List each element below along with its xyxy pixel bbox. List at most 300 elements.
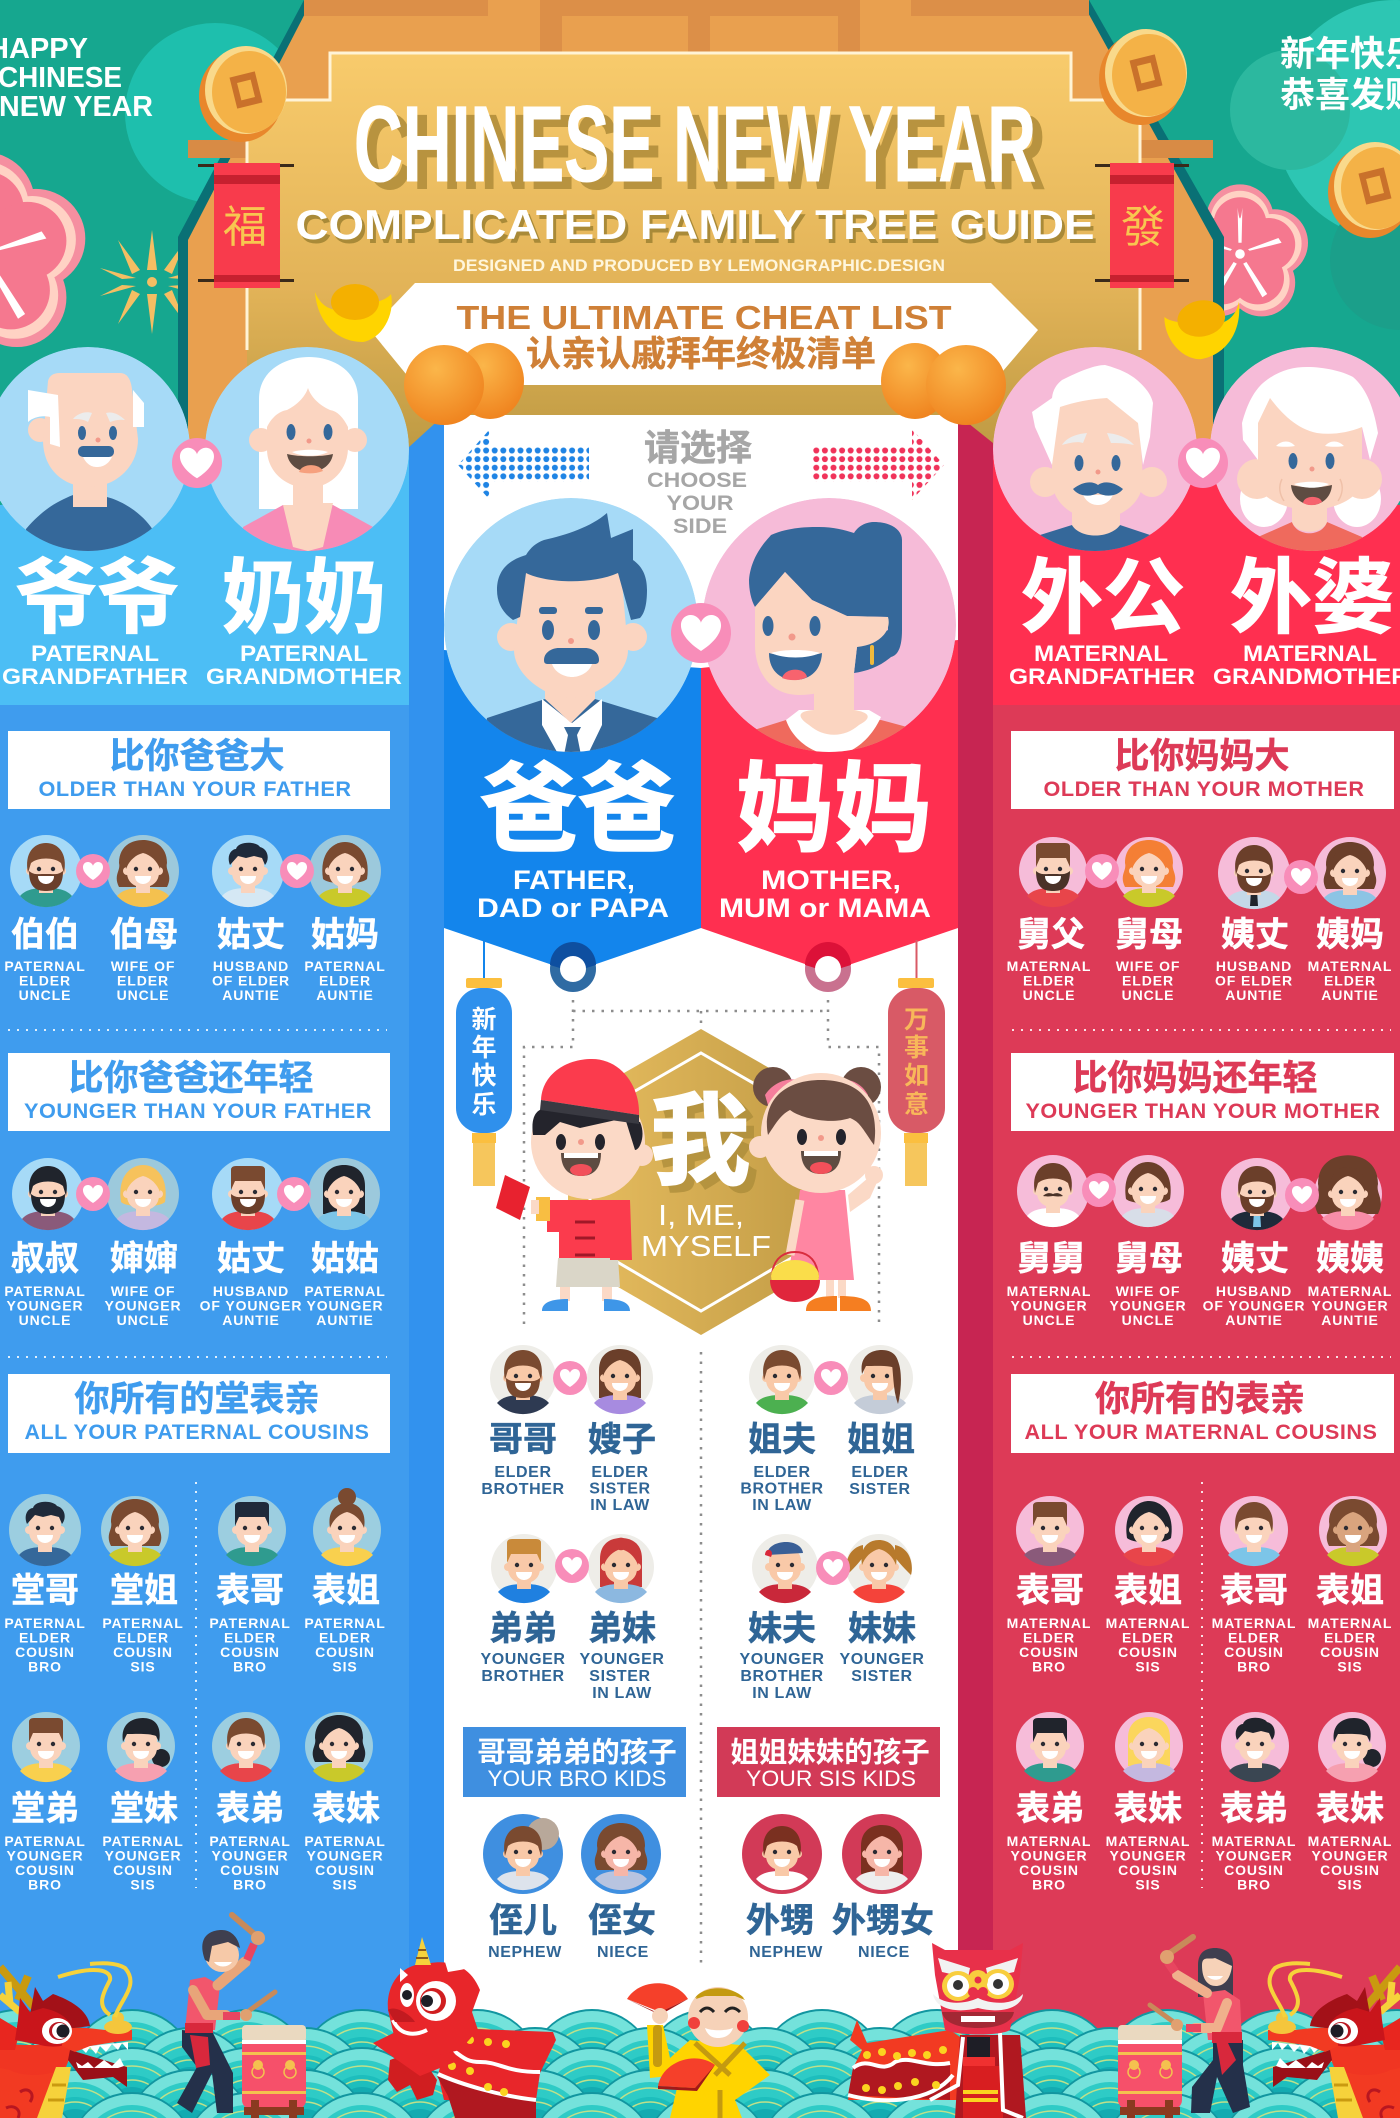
card: husband of younger auntie: 姨丈 bbox=[1221, 1240, 1289, 1278]
card: wife of elder uncle: WIFE OF bbox=[111, 958, 175, 974]
hexagon: me bbox=[568, 1029, 834, 1335]
card: maternal elder cousin bro: ELDER bbox=[1023, 1630, 1075, 1646]
card: maternal younger cousin bro: YOUNGER bbox=[1010, 1848, 1088, 1864]
heart: paternal grandparents bbox=[172, 438, 222, 488]
card: paternal younger cousin sis: PATERNAL bbox=[102, 1833, 184, 1849]
name: maternal grandmother: GRANDMOTHER bbox=[1213, 664, 1400, 689]
card: elder sister in law: SISTER bbox=[589, 1480, 651, 1498]
lantern left: 新 bbox=[471, 1006, 497, 1034]
card: paternal elder cousin bro: PATERNAL bbox=[209, 1615, 291, 1631]
card: paternal elder cousin sis: 堂姐 bbox=[110, 1572, 178, 1610]
card: husband of younger auntie: OF YOUNGER bbox=[200, 1298, 302, 1314]
oranges left bbox=[404, 343, 524, 425]
card: maternal elder cousin bro: 表哥 bbox=[1220, 1572, 1288, 1610]
greeting: happy chinese new year bbox=[0, 33, 153, 123]
card: maternal elder cousin sis: ELDER bbox=[1122, 1630, 1174, 1646]
choose your side: 请选择 bbox=[644, 427, 752, 468]
arrow left bbox=[458, 429, 589, 500]
card: paternal younger cousin sis: COUSIN bbox=[113, 1862, 173, 1878]
card: maternal younger cousin sis: 表妹 bbox=[1114, 1790, 1182, 1828]
card: maternal younger cousin bro: COUSIN bbox=[1224, 1862, 1284, 1878]
section header: younger than your father bbox=[8, 1053, 390, 1131]
heart bbox=[816, 1551, 850, 1585]
card: paternal younger uncle bbox=[4, 1158, 86, 1328]
card: paternal elder uncle: UNCLE bbox=[19, 987, 71, 1003]
name: maternal grandmother bbox=[1213, 553, 1400, 689]
section header: older than your father: 比你爸爸大 bbox=[109, 737, 285, 776]
card: husband of younger auntie bbox=[200, 1158, 302, 1328]
heart: maternal grandparents bbox=[1178, 438, 1228, 488]
card: maternal elder auntie: MATERNAL bbox=[1308, 958, 1392, 974]
lion left bbox=[373, 1937, 556, 2118]
cheat list banner: THE ULTIMATE CHEAT LIST bbox=[456, 299, 952, 336]
card: maternal elder cousin bro: COUSIN bbox=[1224, 1644, 1284, 1660]
card: paternal elder cousin bro: ELDER bbox=[224, 1630, 276, 1646]
name: mother: 妈妈 bbox=[736, 754, 932, 864]
card: maternal younger cousin bro: 表弟 bbox=[1220, 1790, 1288, 1828]
title bbox=[354, 83, 1046, 212]
heart bbox=[76, 854, 110, 888]
banner: your sis kids bbox=[717, 1727, 940, 1797]
father banner bbox=[444, 650, 701, 992]
card: younger sister in law: IN LAW bbox=[592, 1685, 652, 1702]
card: husband of elder auntie: OF ELDER bbox=[212, 972, 290, 988]
card: husband of younger auntie bbox=[1203, 1158, 1305, 1328]
card: maternal younger auntie: 姨姨 bbox=[1316, 1240, 1384, 1278]
hexagon: me: MYSELF bbox=[641, 1231, 771, 1263]
card: paternal younger uncle: PATERNAL bbox=[4, 1283, 86, 1299]
choose your side: SIDE bbox=[673, 515, 727, 538]
card: niece sis: NIECE bbox=[858, 1944, 910, 1961]
card: wife of younger uncle: YOUNGER bbox=[104, 1298, 182, 1314]
choose your side: YOUR bbox=[666, 492, 734, 515]
card: husband of younger auntie: HUSBAND bbox=[1216, 1283, 1292, 1299]
name: paternal grandmother bbox=[206, 553, 402, 689]
card: paternal younger cousin sis: SIS bbox=[130, 1876, 156, 1892]
section header: older than your father bbox=[8, 731, 390, 809]
card: younger sister bbox=[839, 1534, 925, 1685]
card: maternal younger auntie: MATERNAL bbox=[1308, 1283, 1392, 1299]
card: paternal elder uncle: 伯伯 bbox=[11, 916, 79, 954]
card: paternal elder cousin sis: 表姐 bbox=[312, 1572, 380, 1610]
card: paternal younger cousin bro: COUSIN bbox=[15, 1862, 75, 1878]
card: maternal younger cousin bro: BRO bbox=[1237, 1876, 1271, 1892]
card: wife of elder uncle: UNCLE bbox=[117, 987, 169, 1003]
card: maternal elder cousin bro: 表哥 bbox=[1016, 1572, 1084, 1610]
name: paternal grandfather: GRANDFATHER bbox=[2, 664, 188, 689]
card: younger brother in law: YOUNGER bbox=[739, 1651, 825, 1668]
heart bbox=[814, 1361, 848, 1395]
card: younger sister: YOUNGER bbox=[839, 1651, 925, 1668]
name: maternal grandmother: 外婆 bbox=[1230, 553, 1394, 644]
section header: all your paternal cousins: 你所有的堂表亲 bbox=[74, 1380, 320, 1419]
cheat list banner: 认亲认戚拜年终极清单 bbox=[526, 335, 876, 374]
section header: older than your father: OLDER THAN YOUR FATHER bbox=[38, 778, 352, 801]
card: nephew bro: NEPHEW bbox=[488, 1944, 562, 1961]
card: maternal younger cousin bro: MATERNAL bbox=[1212, 1833, 1296, 1849]
card: paternal younger cousin bro: PATERNAL bbox=[209, 1833, 291, 1849]
card: paternal elder cousin sis: SIS bbox=[130, 1658, 156, 1674]
card: paternal elder cousin bro: ELDER bbox=[19, 1630, 71, 1646]
name: paternal grandfather: PATERNAL bbox=[31, 641, 159, 666]
section header: younger than your mother bbox=[1011, 1053, 1394, 1131]
card: maternal younger cousin bro: MATERNAL bbox=[1007, 1833, 1091, 1849]
card: paternal younger cousin bro: 表弟 bbox=[216, 1790, 284, 1828]
card: maternal elder cousin sis: COUSIN bbox=[1118, 1644, 1178, 1660]
card: elder brother: BROTHER bbox=[481, 1481, 565, 1498]
card: elder brother in law: ELDER bbox=[753, 1464, 811, 1481]
card: younger brother: 弟弟 bbox=[489, 1610, 557, 1648]
card: wife of younger uncle: 舅母 bbox=[1115, 1240, 1183, 1278]
card: elder sister: 姐姐 bbox=[847, 1421, 915, 1459]
label: mother: MOTHER, bbox=[761, 865, 901, 895]
card: paternal elder cousin sis bbox=[304, 1488, 386, 1674]
card: wife of elder uncle bbox=[107, 835, 179, 1003]
name: maternal grandfather: GRANDFATHER bbox=[1009, 664, 1195, 689]
section header: all your maternal cousins: 你所有的表亲 bbox=[1095, 1380, 1305, 1419]
card: paternal younger auntie: 姑姑 bbox=[311, 1240, 379, 1278]
card: maternal younger uncle: MATERNAL bbox=[1007, 1283, 1091, 1299]
card: paternal elder cousin sis: ELDER bbox=[319, 1630, 371, 1646]
card: elder sister in law: ELDER bbox=[591, 1464, 649, 1481]
card: nephew sis bbox=[742, 1814, 823, 1961]
drum right bbox=[1118, 2025, 1182, 2118]
card: maternal elder cousin bro: BRO bbox=[1032, 1658, 1066, 1674]
card: wife of elder uncle: ELDER bbox=[1122, 972, 1174, 988]
drum left bbox=[242, 2025, 306, 2118]
section header: older than your mother: 比你妈妈大 bbox=[1114, 737, 1290, 776]
card: maternal elder cousin sis bbox=[1106, 1496, 1190, 1674]
card: paternal elder uncle: PATERNAL bbox=[4, 958, 86, 974]
card: maternal elder cousin bro bbox=[1007, 1496, 1091, 1674]
card: elder brother in law: BROTHER bbox=[740, 1480, 824, 1498]
card: maternal elder cousin sis: ELDER bbox=[1324, 1630, 1376, 1646]
name: paternal grandfather: 爷爷 bbox=[15, 553, 179, 644]
card: maternal younger uncle: UNCLE bbox=[1023, 1312, 1075, 1328]
section header: younger than your father: 比你爸爸还年轻 bbox=[68, 1059, 314, 1098]
card: elder brother: ELDER bbox=[494, 1464, 552, 1481]
name: father: 爸爸 bbox=[480, 754, 676, 864]
name: maternal grandfather: MATERNAL bbox=[1034, 641, 1168, 666]
card: paternal elder cousin bro: COUSIN bbox=[15, 1644, 75, 1660]
card: elder sister in law: IN LAW bbox=[590, 1497, 650, 1514]
coin left bbox=[199, 46, 287, 142]
card: maternal younger cousin bro: BRO bbox=[1032, 1876, 1066, 1892]
card: paternal elder auntie: AUNTIE bbox=[316, 987, 374, 1003]
label: mother: MUM or MAMA bbox=[719, 893, 931, 923]
card: maternal younger cousin sis: MATERNAL bbox=[1308, 1833, 1392, 1849]
banner: your bro kids: YOUR BRO KIDS bbox=[488, 1766, 666, 1791]
card: maternal younger auntie: AUNTIE bbox=[1321, 1312, 1379, 1328]
lantern left: 年 bbox=[471, 1034, 497, 1062]
scroll right: fa bbox=[1095, 163, 1189, 288]
card: paternal younger cousin sis bbox=[102, 1712, 184, 1892]
drummer left bbox=[177, 1915, 275, 2113]
monkey king with fan bbox=[627, 1983, 770, 2118]
card: maternal elder cousin bro: COUSIN bbox=[1019, 1644, 1079, 1660]
card: wife of younger uncle: YOUNGER bbox=[1109, 1298, 1187, 1314]
portrait: maternal grandfather bbox=[993, 347, 1197, 559]
card: wife of younger uncle bbox=[1109, 1155, 1187, 1328]
lantern right: 意 bbox=[904, 1090, 929, 1119]
card: younger sister in law: 弟妹 bbox=[588, 1610, 656, 1648]
heart bbox=[280, 854, 314, 888]
portrait: paternal grandfather bbox=[0, 347, 190, 559]
greeting: happy chinese new year: CHINESE bbox=[0, 62, 122, 94]
card: maternal elder auntie bbox=[1308, 837, 1392, 1003]
card: paternal younger cousin bro: YOUNGER bbox=[211, 1848, 289, 1864]
card: paternal elder cousin sis: PATERNAL bbox=[102, 1615, 184, 1631]
card: wife of younger uncle: UNCLE bbox=[1122, 1312, 1174, 1328]
card: wife of elder uncle bbox=[1115, 837, 1183, 1003]
card: younger brother in law: IN LAW bbox=[752, 1685, 812, 1702]
card: elder sister bbox=[847, 1345, 915, 1498]
scroll right: fa: 發 bbox=[1121, 203, 1165, 252]
heart bbox=[1284, 860, 1318, 894]
card: maternal elder uncle: UNCLE bbox=[1023, 987, 1075, 1003]
card: wife of younger uncle bbox=[104, 1158, 182, 1328]
waves bbox=[0, 2009, 1400, 2118]
card: paternal younger cousin sis bbox=[304, 1712, 386, 1892]
card: younger brother bbox=[480, 1534, 566, 1685]
card: younger sister in law bbox=[579, 1534, 665, 1702]
subtitle: COMPLICATED FAMILY TREE GUIDE bbox=[298, 205, 1098, 252]
card: paternal younger cousin sis: PATERNAL bbox=[304, 1833, 386, 1849]
card: paternal younger cousin sis: COUSIN bbox=[315, 1862, 375, 1878]
card: paternal elder auntie: 姑妈 bbox=[311, 916, 379, 954]
card: maternal elder cousin sis bbox=[1308, 1496, 1392, 1674]
lantern right: 事 bbox=[904, 1034, 929, 1062]
decorative teal circles bbox=[125, 0, 1400, 330]
heart bbox=[1085, 854, 1119, 888]
card: maternal younger cousin bro: YOUNGER bbox=[1215, 1848, 1293, 1864]
boy bbox=[496, 1059, 653, 1311]
name: maternal grandmother: MATERNAL bbox=[1243, 641, 1377, 666]
lantern left: 快 bbox=[471, 1062, 497, 1090]
section header: younger than your mother: 比你妈妈还年轻 bbox=[1072, 1059, 1318, 1098]
card: paternal younger cousin bro: 堂弟 bbox=[11, 1790, 79, 1828]
lantern left bbox=[456, 940, 512, 1186]
card: younger brother in law: BROTHER bbox=[740, 1668, 824, 1685]
scroll left: fu bbox=[198, 163, 294, 288]
card: husband of younger auntie: AUNTIE bbox=[222, 1312, 280, 1328]
card: paternal elder cousin sis: PATERNAL bbox=[304, 1615, 386, 1631]
lantern right: 如 bbox=[904, 1062, 929, 1090]
choose your side bbox=[644, 427, 752, 538]
card: maternal elder uncle bbox=[1007, 837, 1091, 1003]
card: maternal elder auntie: ELDER bbox=[1324, 972, 1376, 988]
dragon right bbox=[1268, 1963, 1400, 2118]
greeting: chinese bbox=[1280, 35, 1400, 115]
card: husband of elder auntie bbox=[1215, 837, 1293, 1003]
card: paternal elder auntie bbox=[304, 835, 386, 1003]
section header: younger than your mother: YOUNGER THAN YOUR MOTHER bbox=[1026, 1100, 1380, 1123]
card: paternal elder cousin bro bbox=[209, 1496, 291, 1674]
section header: all your maternal cousins: ALL YOUR MATERNAL COUSINS bbox=[1024, 1421, 1378, 1444]
card: paternal elder cousin sis: COUSIN bbox=[315, 1644, 375, 1660]
card: husband of younger auntie: OF YOUNGER bbox=[1203, 1298, 1305, 1314]
heart bbox=[76, 1177, 110, 1211]
card: wife of elder uncle: 舅母 bbox=[1115, 916, 1183, 954]
card: paternal elder uncle: ELDER bbox=[19, 972, 71, 988]
card: paternal elder cousin bro bbox=[4, 1494, 86, 1674]
card: maternal younger uncle: 舅舅 bbox=[1017, 1240, 1085, 1278]
card: husband of younger auntie: HUSBAND bbox=[213, 1283, 289, 1299]
coin right bbox=[1099, 29, 1187, 125]
card: maternal younger cousin sis: 表妹 bbox=[1316, 1790, 1384, 1828]
card: maternal younger auntie: YOUNGER bbox=[1311, 1298, 1389, 1314]
card: husband of younger auntie: 姑丈 bbox=[217, 1240, 285, 1278]
card: paternal younger cousin bro: BRO bbox=[28, 1876, 62, 1892]
oranges right bbox=[881, 343, 1006, 425]
card: maternal elder cousin bro: ELDER bbox=[1228, 1630, 1280, 1646]
flower left bbox=[0, 152, 85, 347]
lantern right bbox=[888, 940, 945, 1186]
card: niece bro bbox=[581, 1814, 661, 1961]
card: elder brother: 哥哥 bbox=[489, 1421, 557, 1459]
card: paternal elder cousin sis: SIS bbox=[332, 1658, 358, 1674]
scroll left: fu: 福 bbox=[223, 203, 267, 252]
card: wife of elder uncle: UNCLE bbox=[1122, 987, 1174, 1003]
card: maternal elder cousin bro bbox=[1212, 1496, 1296, 1674]
card: maternal elder cousin sis: 表姐 bbox=[1114, 1572, 1182, 1610]
card: husband of elder auntie bbox=[212, 835, 290, 1003]
choose your side: CHOOSE bbox=[647, 469, 747, 492]
card: wife of elder uncle: 伯母 bbox=[110, 916, 178, 954]
card: maternal younger auntie bbox=[1308, 1155, 1392, 1328]
temple roof bbox=[178, 0, 1224, 480]
card: maternal elder uncle: ELDER bbox=[1023, 972, 1075, 988]
card: maternal younger cousin sis: COUSIN bbox=[1118, 1862, 1178, 1878]
card: maternal elder cousin sis: SIS bbox=[1337, 1658, 1363, 1674]
card: elder brother in law: 姐夫 bbox=[748, 1421, 816, 1459]
name: maternal grandfather bbox=[1009, 553, 1195, 689]
card: elder sister: SISTER bbox=[849, 1481, 911, 1498]
lantern right: 万 bbox=[904, 1006, 929, 1034]
card: husband of elder auntie: 姑丈 bbox=[217, 916, 285, 954]
card: maternal elder uncle: MATERNAL bbox=[1007, 958, 1091, 974]
card: paternal elder uncle bbox=[4, 835, 86, 1003]
card: maternal elder cousin bro: BRO bbox=[1237, 1658, 1271, 1674]
card: husband of elder auntie: HUSBAND bbox=[1216, 958, 1292, 974]
card: maternal younger cousin sis: SIS bbox=[1337, 1876, 1363, 1892]
name: maternal grandfather: 外公 bbox=[1021, 553, 1185, 644]
label: mother bbox=[719, 865, 931, 923]
card: paternal younger auntie bbox=[304, 1158, 386, 1328]
card: younger sister: 妹妹 bbox=[848, 1610, 916, 1648]
card: niece bro: 侄女 bbox=[588, 1902, 656, 1940]
card: wife of younger uncle: 婶婶 bbox=[110, 1240, 178, 1278]
card: maternal younger cousin bro bbox=[1007, 1712, 1091, 1892]
card: wife of elder uncle: WIFE OF bbox=[1116, 958, 1180, 974]
name: paternal grandfather bbox=[2, 553, 188, 689]
card: husband of elder auntie: 姨丈 bbox=[1221, 916, 1289, 954]
card: maternal elder cousin sis: MATERNAL bbox=[1106, 1615, 1190, 1631]
section header: all your maternal cousins bbox=[1011, 1374, 1394, 1453]
card: paternal younger cousin bro: YOUNGER bbox=[6, 1848, 84, 1864]
card: paternal younger cousin sis: SIS bbox=[332, 1876, 358, 1892]
card: elder brother in law bbox=[740, 1345, 824, 1514]
card: paternal younger cousin bro bbox=[209, 1712, 291, 1892]
card: paternal elder cousin sis: COUSIN bbox=[113, 1644, 173, 1660]
heart bbox=[553, 1361, 587, 1395]
section header: younger than your father: YOUNGER THAN YOUR FATHER bbox=[24, 1100, 372, 1123]
flower right bbox=[1172, 184, 1308, 316]
card: paternal younger uncle: YOUNGER bbox=[6, 1298, 84, 1314]
banner: your bro kids bbox=[463, 1727, 686, 1797]
hexagon: me: 我 bbox=[658, 1093, 758, 1205]
card: maternal younger cousin bro bbox=[1212, 1712, 1296, 1892]
card: maternal elder cousin sis: 表姐 bbox=[1316, 1572, 1384, 1610]
gold ingot right bbox=[1162, 294, 1248, 364]
card: nephew sis: 外甥 bbox=[746, 1902, 814, 1940]
card: maternal younger cousin sis: YOUNGER bbox=[1311, 1848, 1389, 1864]
card: niece bro: NIECE bbox=[597, 1944, 649, 1961]
card: maternal elder auntie: 姨妈 bbox=[1316, 916, 1384, 954]
card: paternal younger cousin bro bbox=[4, 1712, 86, 1892]
card: paternal elder cousin bro: BRO bbox=[28, 1658, 62, 1674]
card: maternal elder cousin sis: COUSIN bbox=[1320, 1644, 1380, 1660]
card: niece sis bbox=[832, 1814, 934, 1961]
heart bbox=[277, 1177, 311, 1211]
card: maternal younger cousin sis bbox=[1106, 1712, 1190, 1892]
card: paternal elder cousin bro: COUSIN bbox=[220, 1644, 280, 1660]
card: nephew bro: 侄儿 bbox=[489, 1902, 557, 1940]
card: younger brother: BROTHER bbox=[481, 1668, 565, 1685]
card: maternal elder cousin bro: MATERNAL bbox=[1007, 1615, 1091, 1631]
label: father: FATHER, bbox=[513, 865, 635, 895]
card: paternal younger uncle: 叔叔 bbox=[11, 1240, 79, 1278]
card: maternal younger cousin sis bbox=[1308, 1712, 1392, 1892]
card: maternal younger cousin sis: YOUNGER bbox=[1109, 1848, 1187, 1864]
card: maternal younger cousin sis: MATERNAL bbox=[1106, 1833, 1190, 1849]
center white column bbox=[444, 415, 958, 2118]
arrow right bbox=[812, 429, 944, 500]
card: paternal elder cousin bro: 表哥 bbox=[216, 1572, 284, 1610]
card: younger brother: YOUNGER bbox=[480, 1651, 566, 1668]
card: maternal elder cousin sis: MATERNAL bbox=[1308, 1615, 1392, 1631]
card: paternal elder auntie: ELDER bbox=[319, 972, 371, 988]
dragon left bbox=[0, 1963, 132, 2118]
card: maternal elder auntie: AUNTIE bbox=[1321, 987, 1379, 1003]
left side panel bbox=[0, 415, 444, 2118]
card: maternal younger cousin sis: SIS bbox=[1135, 1876, 1161, 1892]
card: younger sister: SISTER bbox=[851, 1668, 913, 1685]
section header: older than your mother bbox=[1011, 731, 1394, 809]
heart: parents bbox=[671, 603, 731, 663]
card: maternal younger cousin bro: 表弟 bbox=[1016, 1790, 1084, 1828]
card: husband of elder auntie: OF ELDER bbox=[1215, 972, 1293, 988]
card: paternal younger cousin bro: BRO bbox=[233, 1876, 267, 1892]
portrait: maternal grandmother bbox=[1210, 347, 1400, 559]
card: paternal elder cousin bro: PATERNAL bbox=[4, 1615, 86, 1631]
card: younger brother in law bbox=[739, 1534, 825, 1702]
banner: your sis kids: 姐姐妹妹的孩子 bbox=[730, 1737, 930, 1769]
card: wife of younger uncle: UNCLE bbox=[117, 1312, 169, 1328]
card: younger brother in law: 妹夫 bbox=[748, 1610, 816, 1648]
card: wife of younger uncle: WIFE OF bbox=[111, 1283, 175, 1299]
card: maternal elder cousin bro: MATERNAL bbox=[1212, 1615, 1296, 1631]
portrait: mother bbox=[702, 498, 956, 755]
card: niece sis: 外甥女 bbox=[832, 1902, 934, 1940]
card: elder brother bbox=[481, 1345, 565, 1498]
section header: all your paternal cousins bbox=[8, 1374, 390, 1453]
card: husband of elder auntie: AUNTIE bbox=[222, 987, 280, 1003]
card: elder brother in law: IN LAW bbox=[752, 1497, 812, 1514]
basket bbox=[770, 1252, 820, 1302]
card: paternal younger auntie: YOUNGER bbox=[306, 1298, 384, 1314]
name: paternal grandmother: GRANDMOTHER bbox=[206, 664, 402, 689]
